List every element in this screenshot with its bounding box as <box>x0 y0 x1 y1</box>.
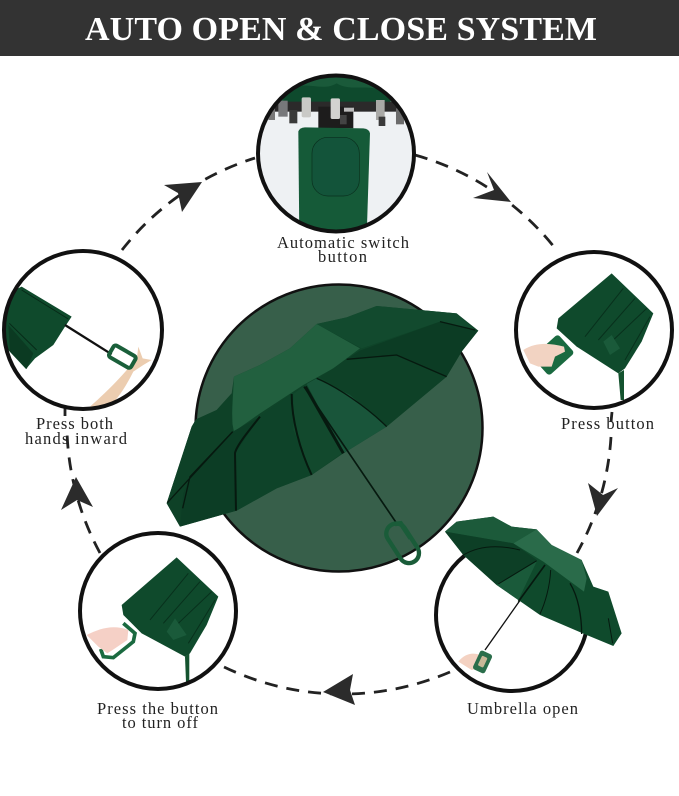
dashed cycle path <box>65 155 612 694</box>
caption: button <box>318 247 367 266</box>
caption <box>277 233 410 266</box>
ring <box>516 252 672 408</box>
panel: central open umbrella <box>167 284 482 572</box>
ring <box>258 76 414 232</box>
handle <box>101 623 135 658</box>
photo: folded umbrella with arm <box>3 287 152 408</box>
handle <box>540 335 574 375</box>
hand <box>87 627 128 653</box>
switch body <box>298 127 370 237</box>
ring <box>436 539 588 691</box>
panel: press button <box>516 252 672 433</box>
photo: closed umbrella with hand <box>523 273 653 400</box>
arrowhead: top right <box>473 172 511 202</box>
panel: automatic switch button <box>253 70 420 266</box>
photo: handle close-up <box>260 78 412 230</box>
ring <box>80 533 236 689</box>
arrowhead: right <box>588 483 618 516</box>
ring <box>4 251 162 409</box>
title banner: AUTO OPEN & CLOSE SYSTEM <box>85 11 597 48</box>
photo: closed umbrella with hand on handle <box>87 557 218 682</box>
arrowhead: bottom <box>323 674 355 705</box>
caption: hands inward <box>25 429 128 448</box>
large umbrella <box>167 306 478 567</box>
caption <box>97 699 218 732</box>
switch outline <box>312 137 359 196</box>
caption: to turn off <box>122 713 198 732</box>
arrowhead: left <box>61 477 93 510</box>
handle <box>382 520 423 567</box>
caption <box>25 414 128 448</box>
caption: Press both <box>36 414 114 433</box>
title banner <box>0 0 679 56</box>
caption: Umbrella open <box>467 699 578 718</box>
caption: Press button <box>561 414 654 433</box>
photo: small open umbrella <box>445 517 622 674</box>
panel: press both hands inward <box>3 251 162 448</box>
caption: Press the button <box>97 699 218 718</box>
hand <box>523 344 565 367</box>
panel: umbrella open <box>436 517 622 718</box>
caption: Automatic switch <box>277 233 410 252</box>
arrowhead: top left <box>164 182 202 212</box>
panel: press the button to turn off <box>80 533 236 732</box>
central backdrop circle <box>196 284 482 572</box>
